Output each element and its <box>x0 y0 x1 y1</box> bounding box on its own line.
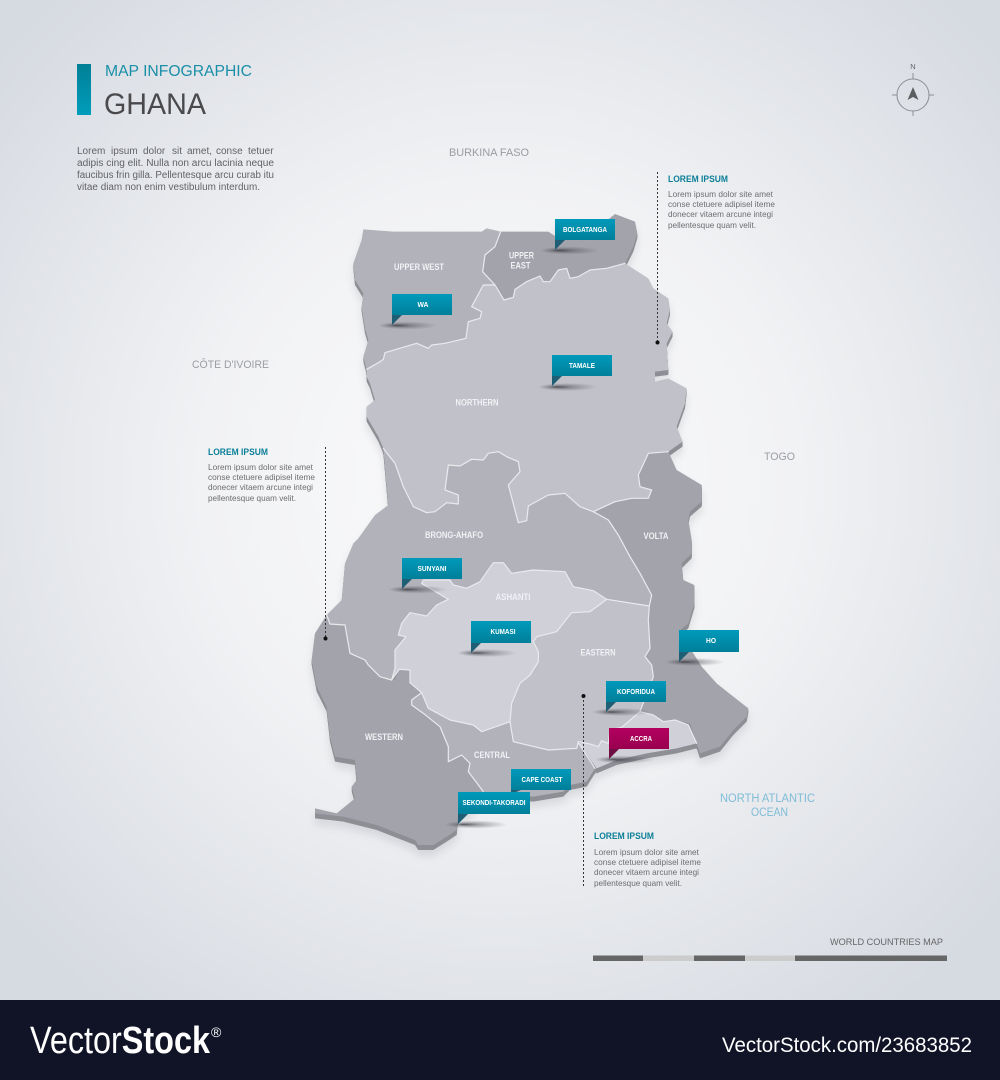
callout: top right: LOREM IPSUM <box>668 174 728 184</box>
callout: bottom <box>582 694 701 888</box>
pin: Kumasi <box>457 621 531 657</box>
region labels: ASHANTI <box>496 592 530 602</box>
pin: Bolgatanga <box>540 219 615 254</box>
intro paragraph: dolor <box>143 146 166 157</box>
intro paragraph: amet, <box>187 146 212 157</box>
pin: Tamale: TAMALE <box>569 361 595 370</box>
intro paragraph: faucibus frin gilla. Pellentesque arcu curab itu <box>77 170 274 181</box>
region: Ashanti <box>392 563 607 732</box>
intro paragraph: ipsum <box>111 146 138 157</box>
neighbouring country labels: NORTH ATLANTIC <box>720 793 815 805</box>
region labels: UPPER <box>509 250 534 260</box>
compass icon <box>892 62 934 116</box>
region: Volta <box>593 452 748 753</box>
callout: left: donecer vitaem arcune integi <box>208 482 313 492</box>
region: Northern <box>367 263 687 523</box>
callout: top right: donecer vitaem arcune integi <box>668 209 773 219</box>
neighbouring country labels: OCEAN <box>751 807 788 819</box>
region: Greater Accra <box>578 712 697 768</box>
pin: Accra (capital): ACCRA <box>630 734 652 743</box>
intro paragraph: tetuer <box>248 146 274 157</box>
scale bar and caption: WORLD COUNTRIES MAP <box>830 937 943 948</box>
region: Eastern <box>510 599 653 750</box>
footer band <box>0 1000 1000 1080</box>
neighbouring country labels: TOGO <box>764 451 795 463</box>
footer image id: VectorStock.com/23683852 <box>722 1034 972 1057</box>
pin: Sekondi-Takoradi <box>444 792 530 828</box>
scale bar and caption <box>593 937 947 961</box>
region: Upper West <box>353 228 501 369</box>
intro paragraph <box>77 146 274 193</box>
region: Brong-Ahafo <box>327 448 652 680</box>
callout: bottom: pellentesque quam velit. <box>594 878 682 888</box>
pin: Kumasi: KUMASI <box>490 627 516 636</box>
callout: top right: Lorem ipsum dolor site amet <box>668 189 774 199</box>
region labels: UPPER WEST <box>394 262 444 272</box>
region: Central <box>412 693 595 797</box>
compass icon: N <box>910 62 916 71</box>
pin: Wa: WA <box>418 300 429 309</box>
map of Ghana regions <box>312 214 748 845</box>
pin: Bolgatanga: BOLGATANGA <box>563 225 607 234</box>
callout: top right <box>656 172 775 344</box>
title block <box>77 63 252 121</box>
region labels: EAST <box>510 260 531 270</box>
neighbouring country labels <box>192 147 815 819</box>
region labels: CENTRAL <box>474 750 510 760</box>
pin: Koforidua <box>592 681 666 716</box>
pin: Accra (capital) <box>595 728 669 764</box>
pin: Koforidua: KOFORIDUA <box>617 687 655 696</box>
region labels: VOLTA <box>644 531 669 541</box>
neighbouring country labels: CÔTE D'IVOIRE <box>192 358 269 371</box>
callout: top right: conse ctetuere adipisel iteme <box>668 199 775 209</box>
callout: left: Lorem ipsum dolor site amet <box>208 462 314 472</box>
intro paragraph: Lorem <box>77 146 105 157</box>
intro paragraph: conse <box>216 146 243 157</box>
callout: bottom: donecer vitaem arcune integi <box>594 867 699 877</box>
title: GHANA <box>104 88 206 121</box>
pin: Cape Coast <box>511 769 571 794</box>
registered mark: ® <box>211 1024 222 1040</box>
pin: Sekondi-Takoradi: SEKONDI-TAKORADI <box>462 798 526 807</box>
callout: bottom: conse ctetuere adipisel iteme <box>594 857 701 867</box>
region: Upper East <box>483 214 637 300</box>
region: Western <box>312 615 483 845</box>
pin: Ho <box>665 630 739 666</box>
intro paragraph: vitae diam non enim vestibulum interdum. <box>77 182 260 193</box>
intro paragraph: sit <box>172 146 182 157</box>
region labels: BRONG-AHAFO <box>425 530 483 540</box>
callout: left <box>208 447 328 640</box>
neighbouring country labels: BURKINA FASO <box>449 147 529 159</box>
callout: left: conse ctetuere adipisel iteme <box>208 472 315 482</box>
region labels: NORTHERN <box>456 398 498 408</box>
pin: Ho: HO <box>706 636 716 645</box>
pin: Wa <box>378 294 452 330</box>
region labels: WESTERN <box>365 732 403 742</box>
subtitle: MAP INFOGRAPHIC <box>105 63 252 80</box>
callout: bottom: Lorem ipsum dolor site amet <box>594 847 700 857</box>
region labels <box>365 250 669 760</box>
pin: Cape Coast: CAPE COAST <box>522 775 563 784</box>
pin: Sunyani <box>388 558 462 594</box>
footer logo: VectorStock <box>30 1020 211 1062</box>
callout: bottom: LOREM IPSUM <box>594 831 654 841</box>
callout: left: pellentesque quam velit. <box>208 493 296 503</box>
pin: Sunyani: SUNYANI <box>418 564 446 573</box>
intro paragraph: adipis cing elit. Nulla non arcu lacinia neque <box>77 158 274 169</box>
region labels: EASTERN <box>580 648 616 658</box>
callout: top right: pellentesque quam velit. <box>668 220 756 230</box>
callout: left: LOREM IPSUM <box>208 447 268 457</box>
pin: Tamale <box>538 355 612 391</box>
title accent bar <box>77 64 91 115</box>
